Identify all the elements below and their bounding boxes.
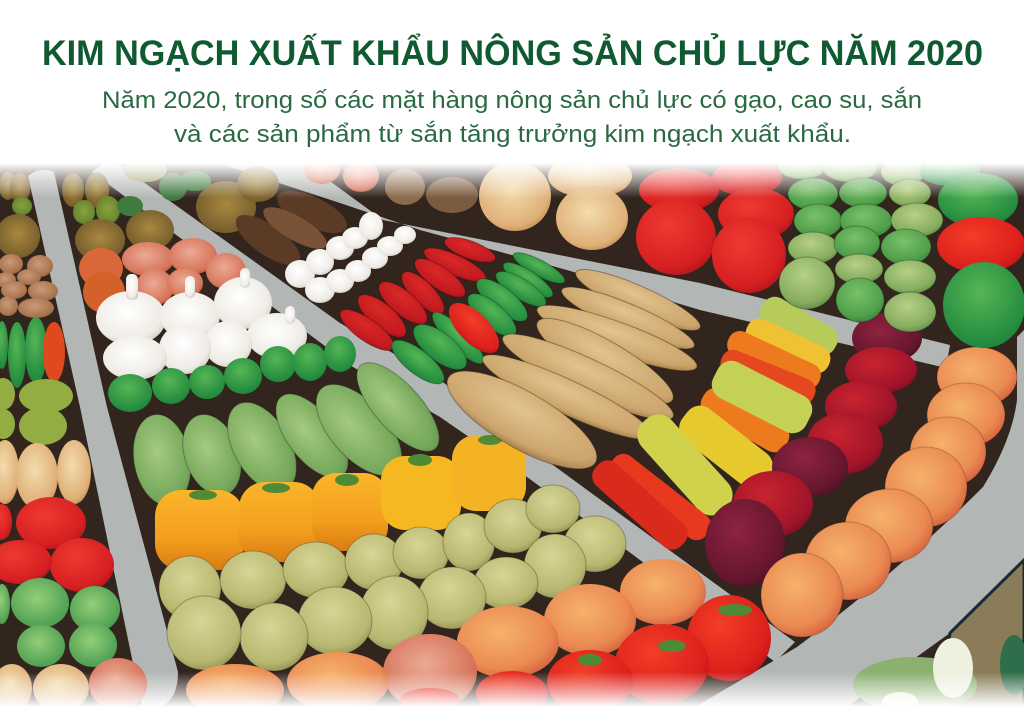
subtitle: [102, 87, 922, 148]
top bed: roots and onions: [304, 154, 632, 250]
second bed: garlic bulbs: [96, 268, 307, 380]
third bed: dark red plums and apples: [705, 313, 922, 587]
far-left bed: chillies: [0, 317, 65, 388]
far-left bed: brown shallots: [0, 254, 58, 318]
subtitle: Năm 2020, trong số các mặt hàng nông sản chủ lực có gạo, cao su, sắn: [102, 87, 922, 114]
third bed: sweet potatoes: [434, 260, 706, 487]
top bed: red apples: [636, 160, 794, 293]
subtitle: và các sản phẩm từ sắn tăng trưởng kim ngạch xuất khẩu.: [174, 121, 851, 148]
top bed: right-hand bell peppers: [920, 158, 1024, 348]
white fade at top of photo: [0, 148, 1024, 198]
second bed: yellow bell peppers: [155, 435, 526, 570]
second bed: zucchini: [126, 350, 453, 510]
top bed: green tomatillos: [778, 154, 943, 332]
grain bed in bottom-right corner: [940, 560, 1024, 707]
second bed: small green gourds: [108, 336, 356, 412]
third bed: small white garlic: [285, 212, 416, 303]
third bed: long mixed peppers: [587, 292, 843, 555]
second bed: cones and chestnuts: [62, 158, 279, 261]
far-left bed: cabbages: [0, 578, 120, 667]
photo: vegetable and fruit display: [0, 148, 1024, 707]
far-left bed: potatoes: [0, 440, 91, 509]
second bed: red bell peppers: [400, 595, 771, 707]
third bed: large red chilli: [441, 295, 507, 361]
far-left bed: red apples: [0, 497, 114, 592]
soil background: [0, 150, 1024, 707]
grey dividers between produce beds: [28, 152, 1024, 707]
far-left bed: bottom tubers: [0, 658, 147, 707]
third bed: peaches along the curve: [761, 347, 1017, 637]
second bed: pine cones: [228, 182, 353, 274]
title: KIM NGẠCH XUẤT KHẨU NÔNG SẢN CHỦ LỰC NĂM 2020: [42, 33, 983, 73]
bottom-right corner vegetables: [853, 635, 1024, 707]
second bed: shallots: [79, 238, 246, 313]
far-left bed: green clusters: [0, 378, 73, 445]
third bed: green chillies: [385, 247, 568, 391]
white fade at bottom of photo: [0, 672, 1024, 707]
far-left bed: cones and chestnuts: [0, 172, 40, 258]
third bed: red chillies: [334, 232, 498, 357]
second bed: potatoes: [159, 485, 626, 671]
second bed: peaches: [186, 559, 706, 707]
